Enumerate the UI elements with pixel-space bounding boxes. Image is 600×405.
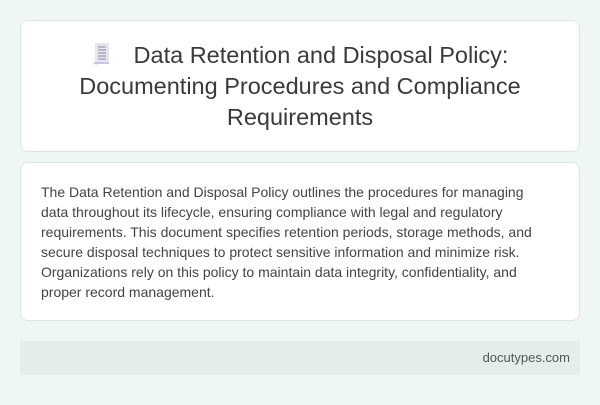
panel: title card: [20, 20, 580, 152]
text block: description: The Data Retention and Disposal Policy outlines the procedures for managing data throughout its lifecycle, ensuring compliance with legal and regulatory requirements. This document specifies retention periods, storage methods, and secure disposal techniques to protect sensitive information and minimize risk. Organizations rely on this policy to maintain data integrity, confidentiality, and proper record management.: [41, 184, 532, 300]
footer: docutypes.com: [483, 350, 570, 365]
footer: [20, 341, 580, 375]
title: Data Retention and Disposal Policy: Documenting Procedures and Compliance Requirements: [79, 42, 521, 130]
panel: description: [20, 162, 580, 321]
